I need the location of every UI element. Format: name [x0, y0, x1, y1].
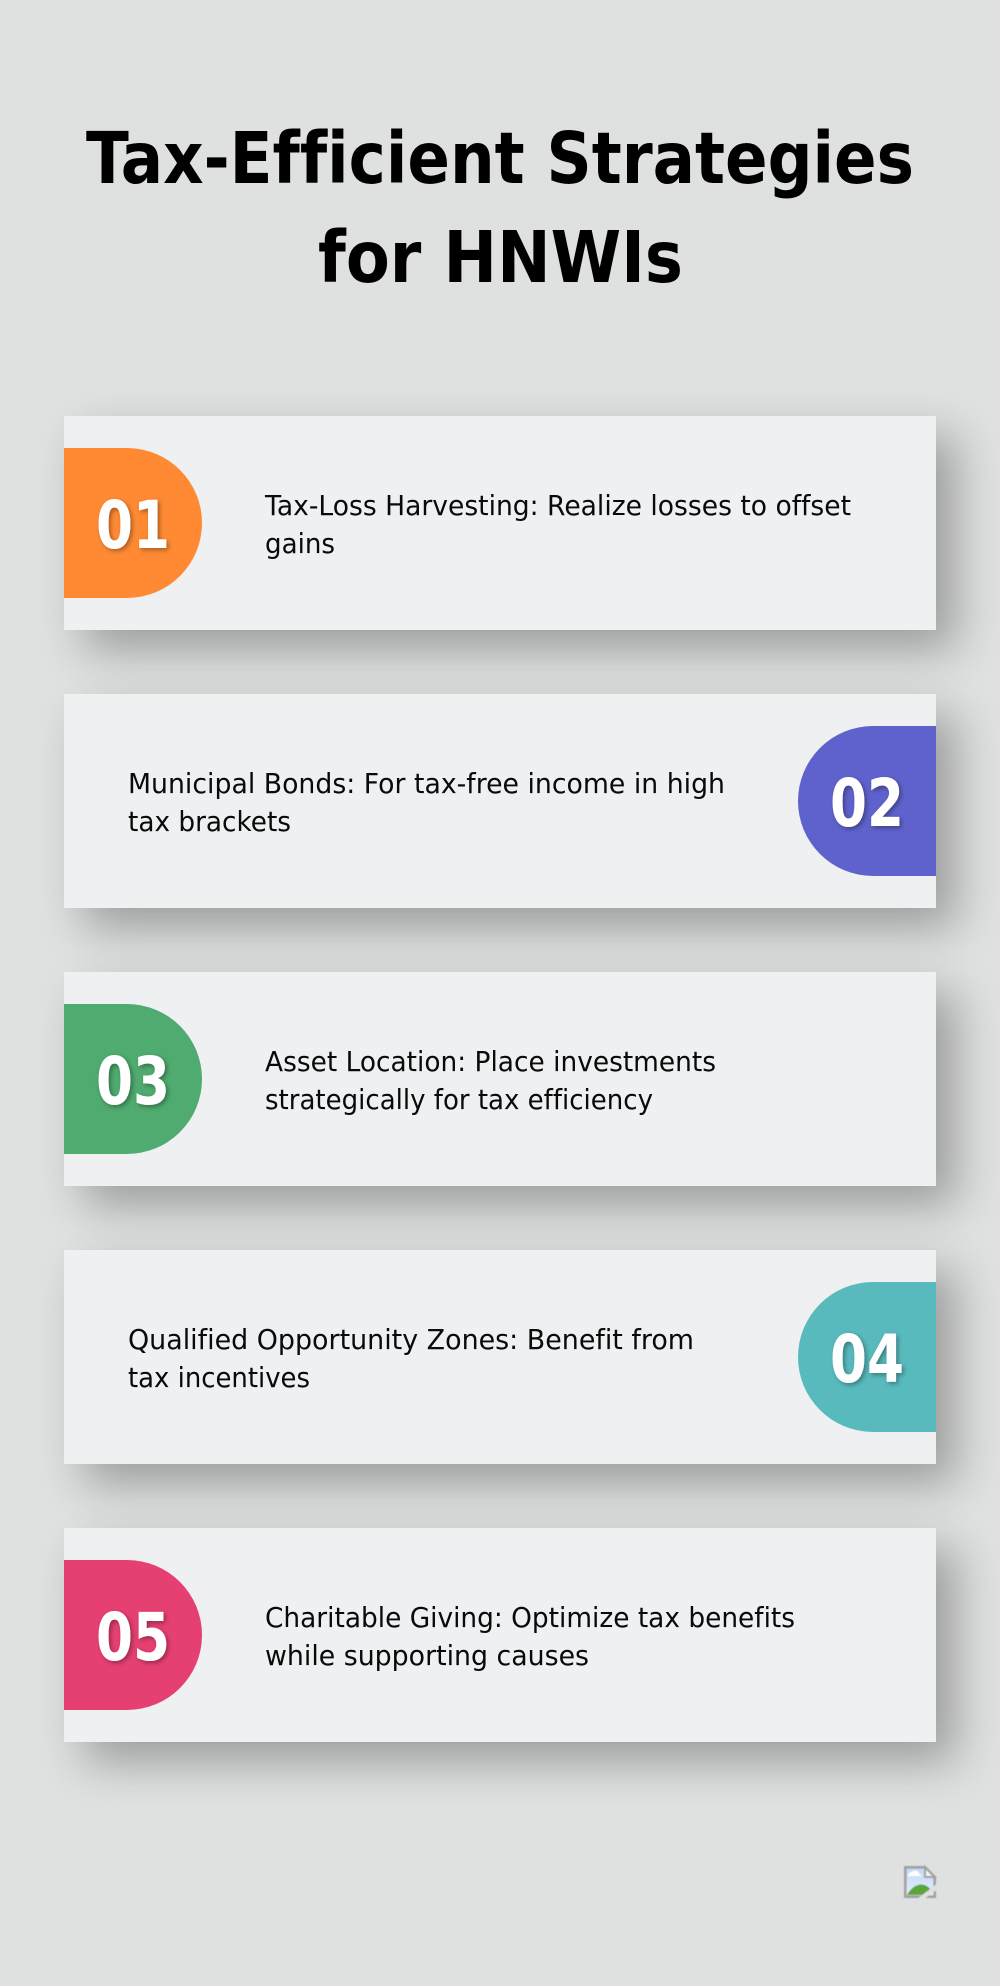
text: step 01 description [264, 490, 851, 560]
badge: 05 [64, 1560, 202, 1710]
badge: 02: 02 [830, 765, 904, 842]
text: step 04 description: Qualified Opportunity Zones: Benefit from [128, 1324, 694, 1356]
title: Tax-Efficient Strategies [86, 117, 914, 200]
text: step 01 description: gains [265, 528, 335, 560]
panel: step 05 charitable giving [64, 1528, 956, 1762]
badge: 03: 03 [96, 1043, 170, 1120]
panel: step 02 municipal bonds [64, 694, 956, 928]
badge: 05: 05 [96, 1599, 170, 1676]
text: step 02 description [128, 768, 725, 838]
badge: 01 [64, 448, 202, 598]
panel: step 03 asset location [64, 972, 956, 1206]
text: step 04 description: tax incentives [128, 1362, 310, 1394]
badge: 04: 04 [830, 1321, 904, 1398]
title: for HNWIs [318, 216, 683, 299]
text: step 05 description: Charitable Giving: Optimize tax benefits [265, 1602, 795, 1634]
text: step 05 description [265, 1602, 795, 1672]
badge: 04 [798, 1282, 936, 1432]
badge: 03 [64, 1004, 202, 1154]
icon: broken image placeholder [905, 1867, 938, 1899]
badge: 01: 01 [96, 487, 170, 564]
text: step 01 description: Tax-Loss Harvesting: Realize losses to offset [264, 490, 851, 522]
text: step 04 description [128, 1324, 694, 1394]
text: step 03 description [265, 1046, 716, 1116]
text: step 02 description: tax brackets [128, 806, 291, 838]
title [86, 117, 914, 299]
text: step 02 description: Municipal Bonds: For tax-free income in high [128, 768, 725, 800]
text: step 03 description: strategically for tax efficiency [265, 1084, 653, 1116]
text: step 03 description: Asset Location: Place investments [265, 1046, 716, 1078]
badge: 02 [798, 726, 936, 876]
text: step 05 description: while supporting causes [265, 1640, 589, 1672]
panel: step 04 qualified opportunity zones [64, 1250, 956, 1484]
panel: step 01 tax-loss harvesting [64, 416, 956, 650]
